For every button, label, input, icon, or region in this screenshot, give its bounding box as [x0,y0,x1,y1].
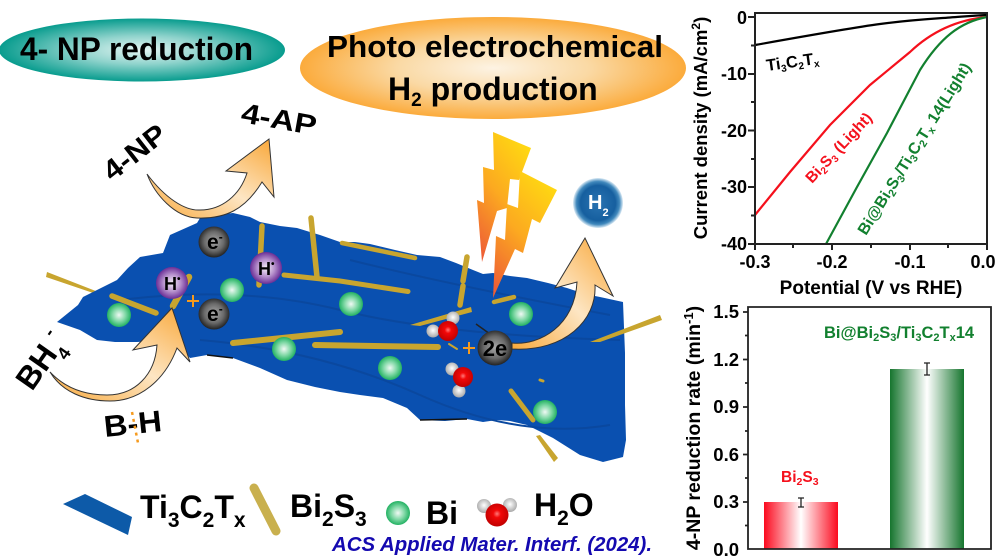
legend: H2O label: H [534,487,557,523]
series label: Bi2S3 (Light): 2 [819,165,831,177]
label: B-H bond: B-H [102,405,163,444]
series label: Ti3C2Tx: 3 [781,63,788,75]
Bi atoms [107,278,557,424]
H+ ions: • [177,274,181,285]
x-axis title: Potential (V vs RHE) [780,278,962,299]
legend: H2O label: 2 [557,507,569,530]
series label: Bi@Bi2S3/Ti3C2Tx 14 (Light): 2 [886,187,899,199]
legend: Bi2S3 label: 3 [355,508,367,531]
legend: Bi2S3 label: S [334,488,355,524]
x-axis numbers: -0.3 [739,252,771,272]
sheet shadow edges and ripples [120,260,620,429]
series label: Ti3C2Tx: Ti [765,55,782,75]
series label: Bi2S3 (Light): S [817,152,836,171]
label: BH4-: - [39,324,59,340]
y-axis numbers: 0.3 [713,491,739,512]
legend: Bi label: Bi [426,495,458,531]
electrons: - [219,302,223,316]
legend: Ti3C2Tx label: 3 [168,509,180,532]
legend: H2O label: O [569,487,594,523]
series label: Ti3C2Tx: 2 [798,61,805,73]
electrons: e [207,303,219,326]
bar label: Bi2S3: Bi [781,469,796,486]
H+ ions: H [164,274,177,294]
heading: photo electrochemical H2 production [300,17,686,119]
legend: Ti3C2Tx swatch [63,494,132,535]
series label: Bi@Bi2S3/Ti3C2Tx 14 (Light): T [914,126,934,143]
y-axis title: Current density (mA/cm [690,30,711,239]
series label: Bi@Bi2S3/Ti3C2Tx 14 (Light): C [905,139,926,158]
x-axis numbers: 0.0 [970,252,996,272]
y-axis title: ) [690,17,711,23]
bar chart: 4-NP reduction rate [681,301,991,557]
illustration: catalyst sheet [46,213,662,462]
series label: Bi2S3 (Light): 3 [830,153,842,165]
y-axis numbers: -20 [721,121,747,141]
series label: Bi@Bi2S3/Ti3C2Tx 14 (Light): 3 [908,153,921,164]
bar label: Bi@Bi2S3/Ti3C2Tx 14: 3 [915,332,921,344]
bar label: Bi@Bi2S3/Ti3C2Tx 14: T [939,324,950,342]
water molecules on sheet [426,312,473,398]
series label: Bi@Bi2S3/Ti3C2Tx 14 (Light): Bi@Bi [855,189,895,238]
arrow: 4-NP to 4-AP [147,139,274,218]
legend: Ti3C2Tx label: 2 [203,509,214,532]
y-axis numbers: 1.2 [713,349,739,370]
y-axis numbers: 0.9 [713,396,739,417]
bar label: Bi2S3: 2 [796,476,802,488]
x-axis numbers: -0.2 [816,252,848,272]
heading: photo electrochemical H2 production: H [388,71,411,107]
plus signs [187,295,475,354]
heading: 4-NP reduction: 4- NP reduction [20,31,253,67]
H+ ions [156,252,282,299]
y-axis numbers: 0 [737,8,747,28]
heading: photo electrochemical H2 production: production [422,71,598,107]
series label: Ti3C2Tx: C [785,53,799,72]
y-axis title: ) [683,306,705,312]
lightning bolts [477,132,557,298]
electrons: - [219,230,223,244]
heading: photo electrochemical H2 production: 2 [411,90,422,111]
y-axis title: 4-NP reduction rate (min [683,324,705,550]
curves [755,15,987,244]
citation: ACS Applied Mater. Interf. (2024). [331,534,652,556]
label: BH4-: BH [8,338,64,396]
label: 4-AP: 4-AP [239,97,319,141]
H+ ions: • [271,259,275,270]
legend: Bi2S3 rod [254,488,276,531]
series label: Bi@Bi2S3/Ti3C2Tx 14 (Light): S [883,174,904,193]
bar label: Bi@Bi2S3/Ti3C2Tx 14: x [950,332,957,344]
bar label: Bi@Bi2S3/Ti3C2Tx 14: Bi@Bi [824,324,873,342]
H+ ions: H [258,259,271,279]
label: BH4-: 4 [53,344,75,363]
y-axis title: 2 [689,23,703,30]
label: BH4- [8,324,75,396]
series label: Bi@Bi2S3/Ti3C2Tx 14 (Light): 2 [917,138,930,149]
bar label: Bi@Bi2S3/Ti3C2Tx 14: /Ti [896,324,915,342]
plot frame and ticks [743,307,991,549]
y-axis numbers [721,8,747,254]
y-axis numbers: 0.6 [713,444,739,465]
y-axis numbers: -10 [721,64,747,84]
2e- electron [476,324,512,366]
legend: Ti3C2Tx label: T [214,489,234,525]
bar label: Bi2S3: 3 [813,476,819,488]
plot frame and ticks [748,13,987,250]
legend: Bi2S3 label: 2 [322,508,334,531]
x-axis numbers [739,252,996,272]
series label: Bi@Bi2S3/Ti3C2Tx 14 (Light): 3 [895,173,908,185]
series label: Bi@Bi2S3/Ti3C2Tx 14 (Light): /Ti [892,154,916,179]
electrons: e [207,231,219,254]
error bars [798,363,930,507]
y-axis numbers [713,301,739,557]
H2 bubble: H [588,192,602,214]
legend: Bi2S3 label: Bi [290,488,322,524]
bar label: Bi@Bi2S3/Ti3C2Tx 14: 2 [933,332,939,344]
bar label: Bi@Bi2S3/Ti3C2Tx 14: 3 [890,332,896,344]
Bi2S3 rods on sheet [112,218,543,420]
H2 bubble [573,178,623,228]
heading: photo electrochemical H2 production: Photo electrochemical [327,29,663,64]
legend: Ti3C2Tx label: x [234,509,246,532]
y-axis title: -1 [681,312,696,324]
electrons [198,226,230,330]
bar: Bi@Bi2S3/Ti3C2Tx 14 [890,369,964,549]
line chart: current density vs potential [689,8,996,299]
2e- electron: 2e [483,336,507,361]
bar: Bi2S3 [764,502,838,549]
legend: Ti3C2Tx label: C [180,489,203,525]
bar label: Bi@Bi2S3/Ti3C2Tx 14: S [879,324,890,342]
bar label: Bi@Bi2S3/Ti3C2Tx 14: 2 [873,332,879,344]
arrow: 2e to H2 [512,238,613,349]
rods behind sheet [46,272,558,462]
y-axis numbers: 1.5 [713,301,739,322]
bar label: Bi@Bi2S3/Ti3C2Tx 14: 14 [956,324,975,342]
bar label: Bi@Bi2S3/Ti3C2Tx 14: C [921,324,933,342]
series label: Ti3C2Tx: T [802,51,815,70]
series label: Bi2S3 (Light): Bi [802,164,825,187]
H2 bubble: 2 [602,207,609,219]
legend: Ti3C2Tx label: Ti [140,489,168,525]
y-axis numbers: -30 [721,177,747,197]
tapered rods [410,307,662,342]
x-axis numbers: -0.1 [894,252,926,272]
series label: Bi2S3 (Light): (Light) [828,110,876,160]
legend: Bi atom [386,501,410,525]
y-axis numbers: -40 [721,234,747,254]
legend [63,487,594,535]
series label: Ti3C2Tx: x [813,59,821,70]
series label: Bi@Bi2S3/Ti3C2Tx 14 (Light): 14(Light) [922,60,975,130]
arrow: BH4- to sheet [50,308,190,401]
label: 4-NP: 4-NP [97,118,172,187]
series label: Bi@Bi2S3/Ti3C2Tx 14 (Light): x [925,125,939,136]
heading: 4-NP reduction [0,18,285,82]
legend: water molecule [477,498,517,526]
blue Ti3C2Tx sheet [57,213,626,462]
bar label: Bi2S3: S [802,469,813,486]
